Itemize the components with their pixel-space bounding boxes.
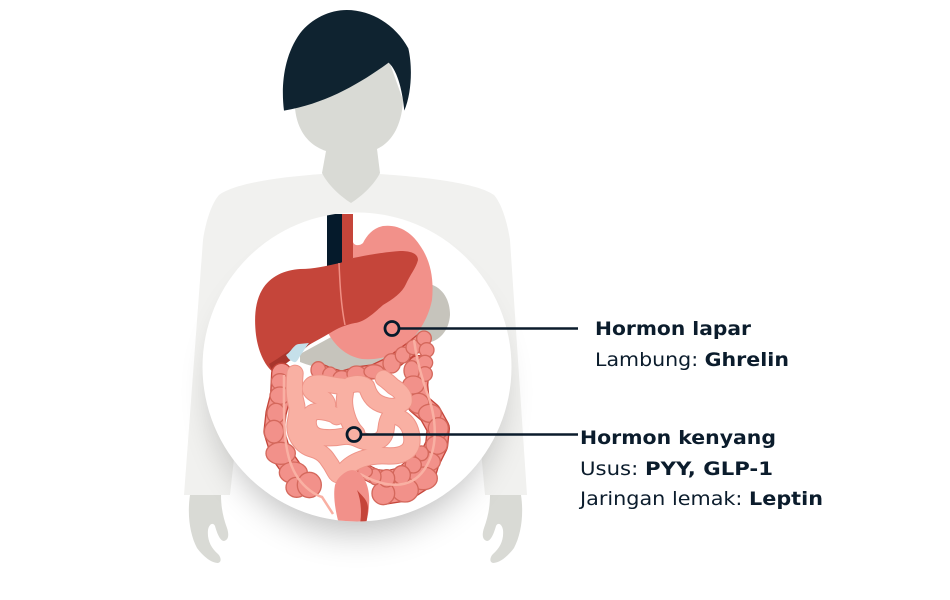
callout: satiety hormone <box>347 427 823 510</box>
liver shadow <box>269 343 311 372</box>
rectum <box>334 470 369 524</box>
stomach <box>328 226 433 359</box>
small intestine <box>294 373 412 475</box>
marker <box>385 322 399 336</box>
colon band <box>284 340 435 514</box>
colon outline <box>274 338 438 493</box>
left hand <box>189 495 228 563</box>
heading: Hormon kenyang <box>580 427 776 449</box>
pancreas <box>300 338 384 370</box>
rectum shadow <box>357 490 368 524</box>
trachea <box>327 214 343 266</box>
gallbladder <box>286 343 309 362</box>
right hand <box>483 495 522 563</box>
hair <box>283 10 411 111</box>
neck and face <box>295 58 403 203</box>
shirt <box>184 174 527 495</box>
large intestine <box>264 331 448 505</box>
spleen <box>414 285 450 342</box>
figure: person <box>184 10 527 563</box>
liver fissure <box>339 263 345 325</box>
marker <box>347 428 361 442</box>
organs <box>255 214 450 524</box>
colon fill <box>274 338 438 493</box>
liver <box>255 251 418 372</box>
circle shadow <box>217 252 497 532</box>
leader line <box>399 327 578 330</box>
infographic <box>184 10 822 563</box>
detail: Lambung: Ghrelin <box>595 349 789 371</box>
detail: intestine: Usus: PYY, GLP-1 <box>580 458 773 480</box>
detail: fat tissue: Jaringan lemak: Leptin <box>579 488 823 510</box>
heading: Hormon lapar <box>595 318 752 340</box>
colon haustra <box>264 331 448 505</box>
small intestine outline <box>294 373 412 475</box>
white circle panel <box>202 212 512 522</box>
leader line <box>361 433 578 436</box>
callout: hunger hormone <box>385 318 789 371</box>
oesophagus <box>342 214 353 264</box>
